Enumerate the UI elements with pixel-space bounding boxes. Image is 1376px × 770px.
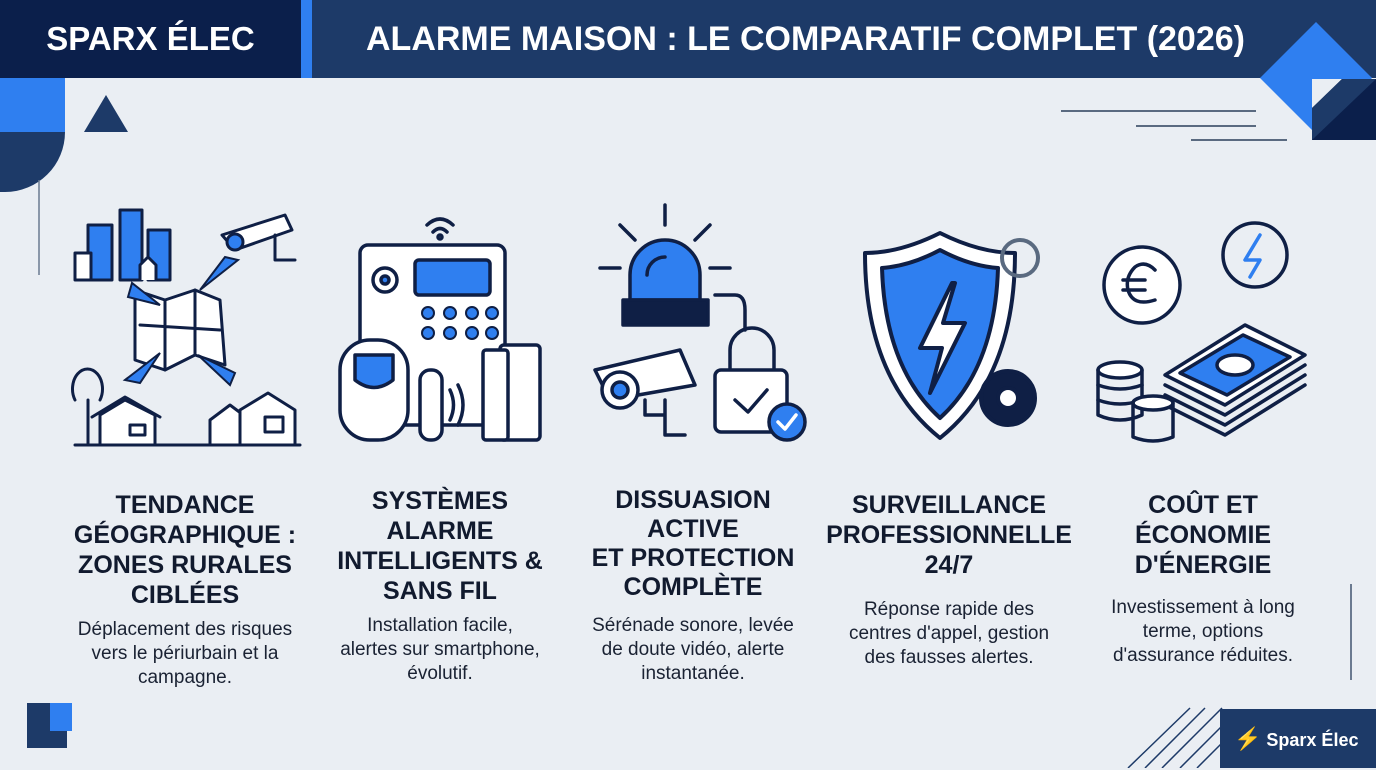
column 4: SURVEILLANCE PROFESSIONNELLE 24/7 <box>826 491 1072 579</box>
column 5: Investissement à long terme, options d'assurance réduites. <box>1111 597 1295 666</box>
icon: siren camera lock <box>593 203 807 442</box>
column 2: Installation facile, <box>367 615 513 636</box>
header title: ALARME MAISON : LE COMPARATIF COMPLET (2026) <box>366 20 1245 58</box>
column 5 <box>1111 490 1295 666</box>
column 3: COMPLÈTE <box>624 573 762 601</box>
footer logo badge <box>1220 709 1376 768</box>
column 2: SYSTÈMES ALARME INTELLIGENTS & SANS FIL <box>337 487 543 605</box>
column 2: alertes sur smartphone, évolutif. <box>340 639 540 684</box>
icon: euro money <box>1096 221 1307 443</box>
column 4 <box>826 491 1072 668</box>
column 3: ACTIVE <box>647 515 739 543</box>
icon: cities map <box>71 208 302 446</box>
column 3: Sérénade sonore, levée de doute vidéo, alerte instantanée. <box>592 615 794 684</box>
column 3: ET PROTECTION <box>592 544 794 572</box>
column 1: Déplacement des risques vers le périurbain et la campagne. <box>78 619 292 688</box>
footer logo badge: ⚡ Sparx Élec <box>1234 726 1358 751</box>
column 2 <box>337 486 543 684</box>
icon: shield <box>863 231 1040 440</box>
column 5: COÛT ET ÉCONOMIE D'ÉNERGIE <box>1135 491 1271 579</box>
header title <box>312 0 1376 78</box>
header left: brand <box>0 0 301 78</box>
column 1 <box>74 491 296 688</box>
column 4: Réponse rapide des centres d'appel, gestion des fausses alertes. <box>849 599 1049 668</box>
column 3: DISSUASION <box>615 486 771 514</box>
icon: alarm devices <box>338 217 542 442</box>
column 1: TENDANCE GÉOGRAPHIQUE : ZONES RURALES CIBLÉES <box>74 491 296 609</box>
column 3 <box>592 486 794 684</box>
header left: brand: SPARX ÉLEC <box>46 20 255 57</box>
